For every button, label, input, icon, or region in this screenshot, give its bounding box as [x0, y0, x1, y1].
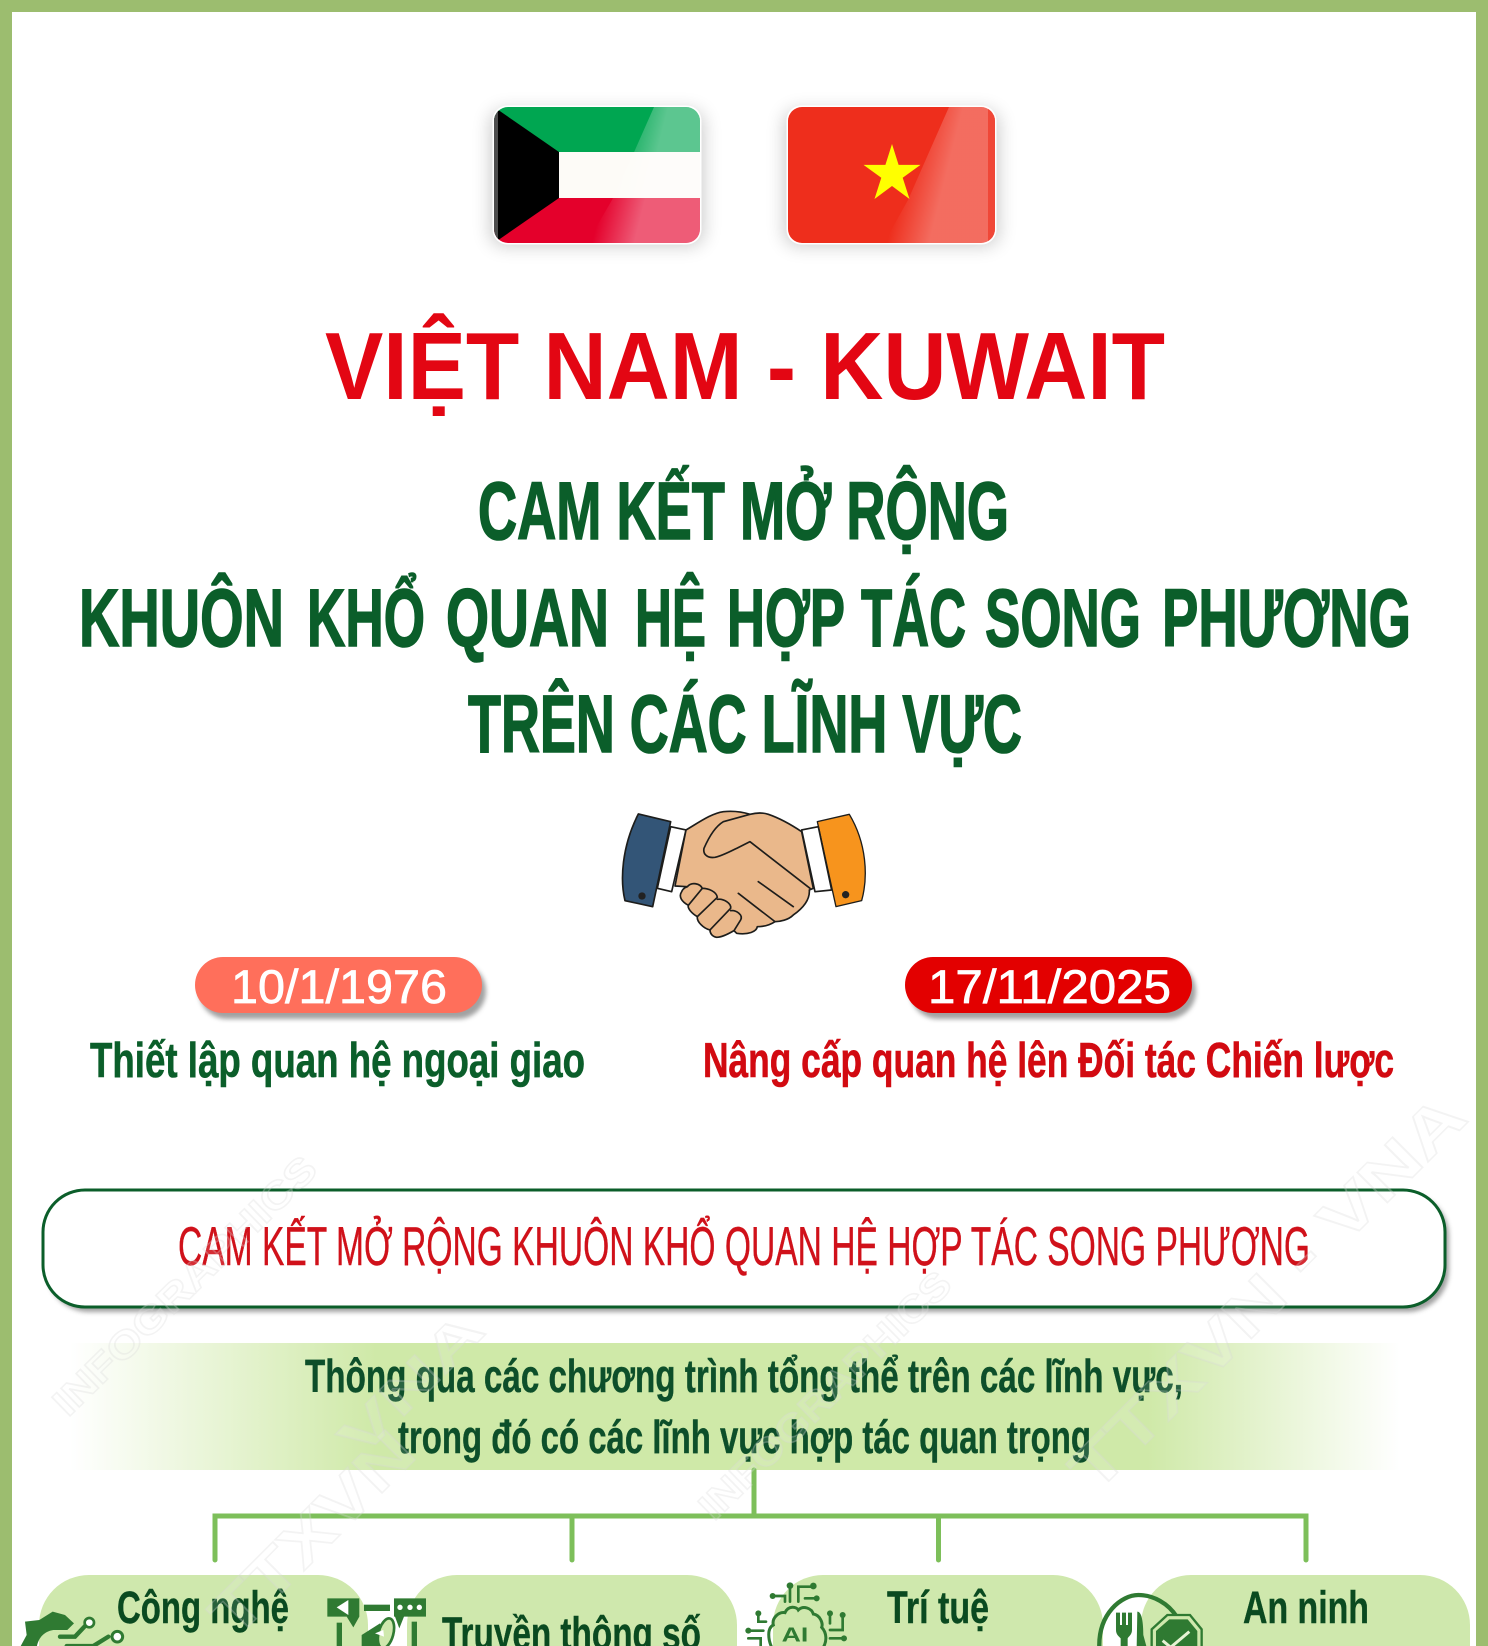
heading box [43, 1190, 1449, 1312]
icon: megaphone [327, 1598, 426, 1646]
card: security [1141, 1575, 1470, 1646]
date: 2025 [905, 957, 1196, 1019]
icon: AI brain: AI [782, 1624, 808, 1646]
subtitle: HỆ [635, 573, 706, 664]
flag: Vietnam [784, 106, 999, 246]
band: programs: trong đó có các lĩnh vực hợp tác quan trọng [398, 1411, 1091, 1463]
date: 1976: 10/1/1976 [231, 960, 447, 1013]
subtitle: KHỔ [307, 573, 425, 664]
band: programs [70, 1343, 1400, 1470]
text: establish relations: Thiết lập quan hệ ngoại giao [90, 1034, 585, 1088]
subtitle: CAM KẾT MỞ RỘNG [478, 466, 1009, 557]
watermarks [45, 1081, 1480, 1646]
hand shape [675, 811, 813, 937]
title: VIỆT NAM - KUWAIT [325, 312, 1165, 420]
star [864, 144, 920, 199]
icon: handshake [623, 811, 865, 937]
band: programs: Thông qua các chương trình tổng thể trên các lĩnh vực, [305, 1350, 1183, 1402]
subtitle [79, 466, 1411, 770]
subtitle: TÁC [861, 573, 966, 664]
subtitle: QUAN [446, 573, 609, 664]
icon: gear circuit [20, 1612, 123, 1646]
icon: food safety shield [1099, 1595, 1202, 1646]
date: 2025: 17/11/2025 [928, 960, 1171, 1013]
watermarks: TTXVN - VNA [1056, 1081, 1480, 1505]
watermarks: VNA [327, 1300, 496, 1468]
card: digital media [407, 1575, 737, 1646]
card: technology [39, 1575, 368, 1646]
card: technology: Công nghệ [117, 1582, 289, 1633]
subtitle: SONG [985, 573, 1141, 664]
subtitle: TRÊN CÁC LĨNH VỰC [468, 678, 1022, 770]
date: 1976 [195, 957, 486, 1019]
watermarks: INFOGRAPHICS [691, 1263, 960, 1528]
card: security: An ninh [1243, 1582, 1369, 1633]
card: AI: Trí tuệ [887, 1582, 989, 1633]
icon: AI brain [745, 1582, 847, 1646]
left sleeve [623, 814, 671, 907]
connector [215, 1470, 1306, 1560]
subtitle: KHUÔN [79, 573, 284, 664]
flag: Kuwait [490, 106, 704, 246]
subtitle: HỢP [727, 573, 845, 664]
watermarks: INFOGRAPHICS [45, 1148, 326, 1424]
right sleeve [817, 814, 865, 907]
watermarks: TTXVN [196, 1417, 429, 1646]
card: AI [773, 1575, 1103, 1646]
